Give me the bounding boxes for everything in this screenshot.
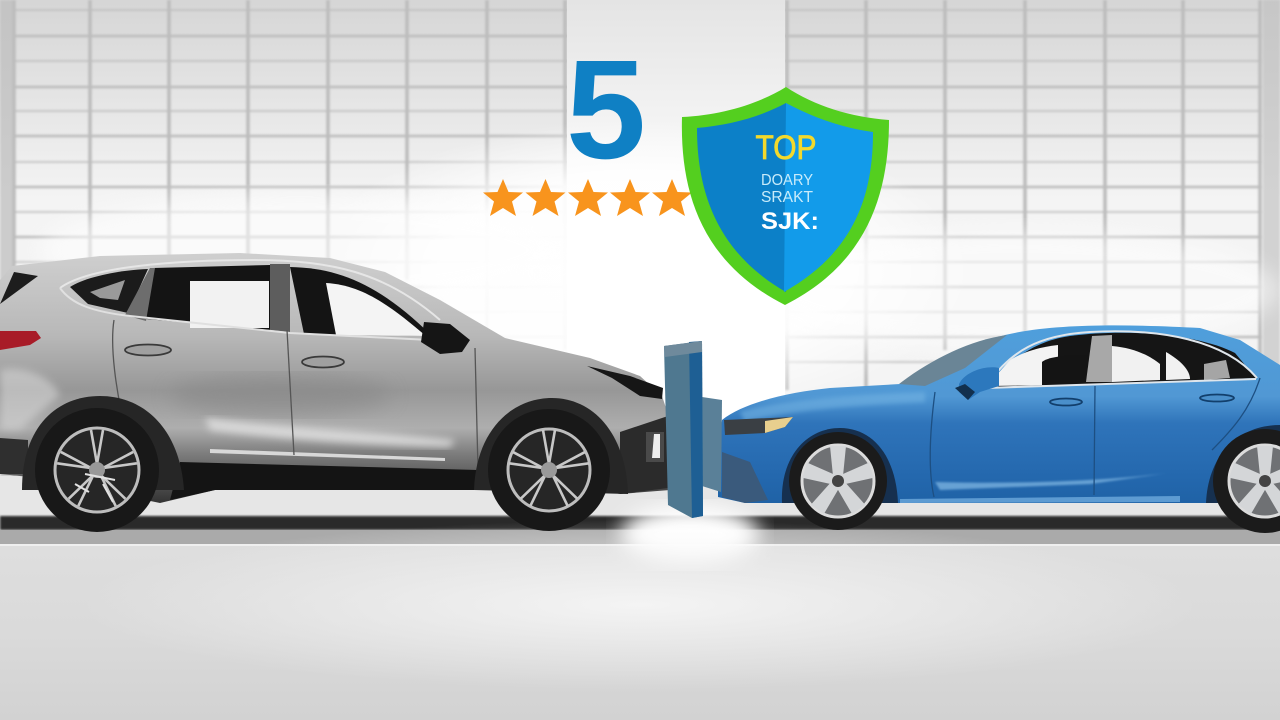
sedan rear wheel (1213, 429, 1280, 533)
SUV tail light (0, 331, 41, 350)
shield badge: SRAKT (761, 189, 813, 206)
background: tiled showroom wall (0, 0, 1280, 480)
shield heading: TOP (756, 129, 816, 167)
five orange stars (483, 179, 692, 216)
number 5: 5 (566, 30, 646, 188)
sedan car: blue (718, 325, 1280, 533)
SUV wheel arches (22, 396, 628, 494)
sedan door lines (930, 378, 1260, 497)
shield small text: DOARY (761, 172, 813, 189)
SUV mirror (421, 322, 470, 354)
shield badge: SJK: (761, 208, 819, 235)
SUV windows (60, 260, 440, 340)
crash barrier (664, 341, 722, 518)
sedan side windows (985, 331, 1257, 388)
SUV rear wheel (35, 408, 159, 532)
sedan mirror (959, 367, 999, 400)
SUV headlight (587, 366, 663, 399)
sedan front wheel (789, 432, 887, 530)
sedan door handles (1050, 394, 1234, 406)
sedan wheel arches (782, 425, 1280, 503)
SUV door lines (113, 320, 478, 470)
sedan body (718, 325, 1280, 503)
shield badge (682, 87, 889, 305)
SUV door handles (125, 344, 344, 368)
floor (0, 476, 1280, 720)
sedan headlight (724, 417, 793, 435)
SUV front wheel (488, 409, 610, 531)
SUV tail window (0, 272, 38, 304)
sedan windshield (899, 335, 1007, 386)
SUV body (0, 253, 670, 503)
SUV car: silver (0, 253, 670, 532)
